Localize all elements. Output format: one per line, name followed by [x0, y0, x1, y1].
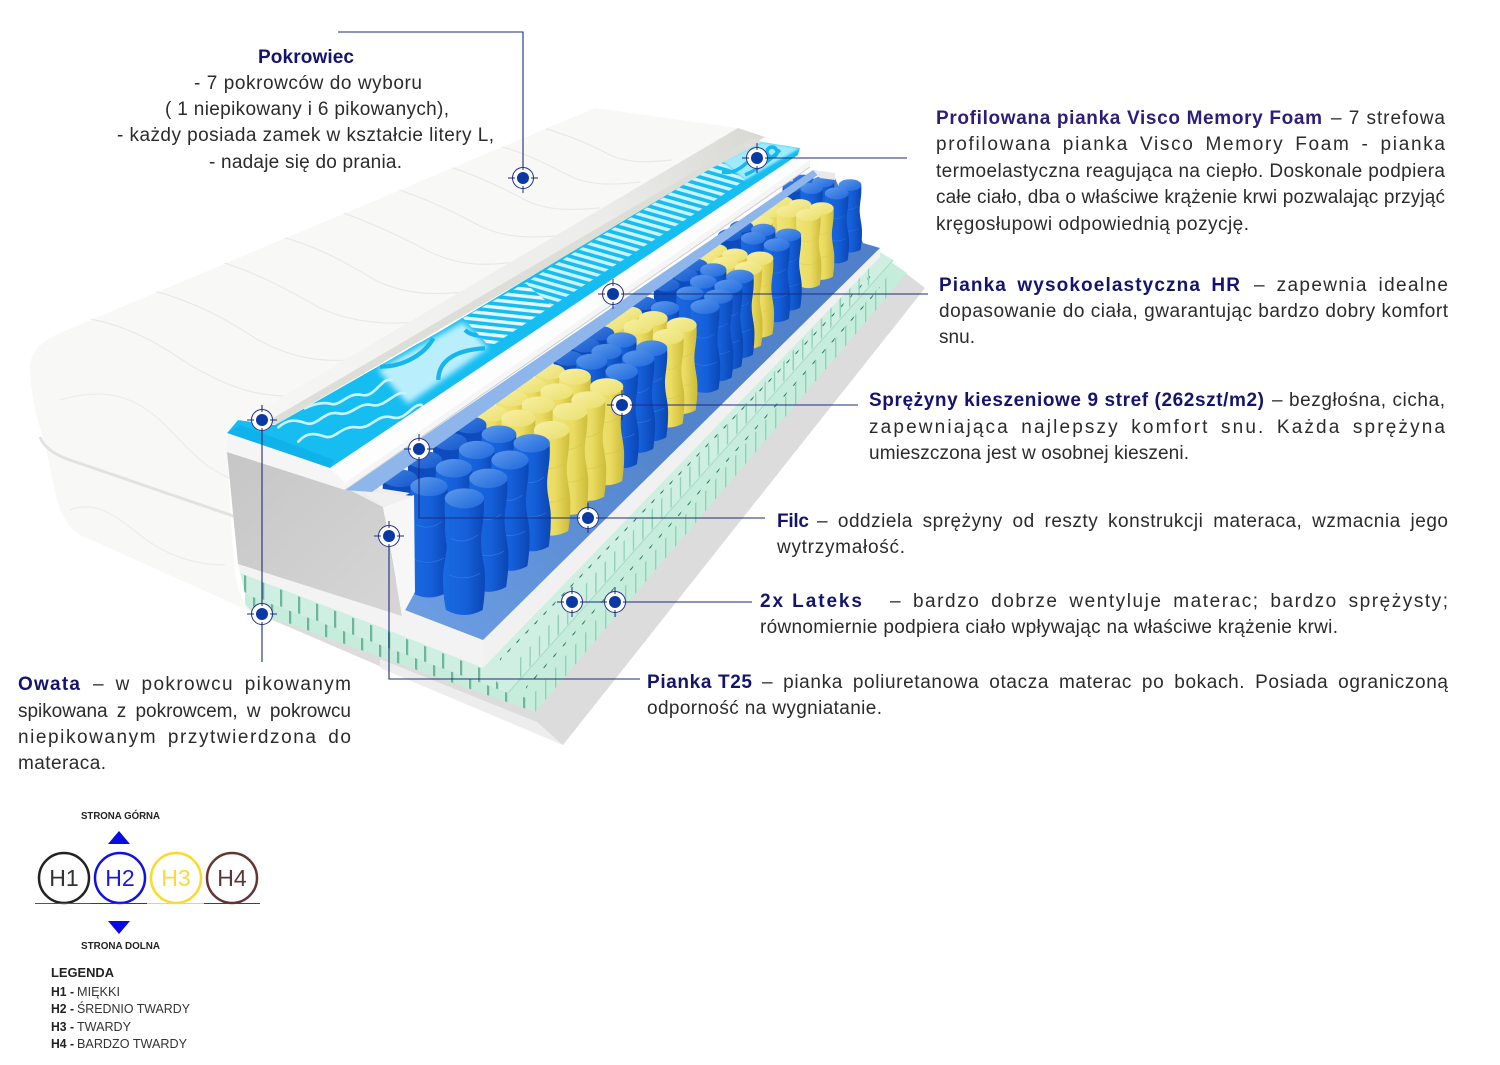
H4: H4 — [217, 865, 247, 891]
callout: Visco Memory Foam — [742, 108, 1445, 235]
legend: BARDZO TWARDY — [77, 1036, 187, 1051]
callout: 2x Lateks: równomiernie podpiera ciało wpływając na właściwe krążenie krwi. — [760, 617, 1338, 638]
callout: Visco Memory Foam: profilowana pianka Visco Memory Foam - pianka — [936, 134, 1445, 155]
legend: H3 - — [51, 1019, 74, 1034]
callout: 2x Lateks — [557, 587, 1448, 638]
pale arc zone — [378, 322, 488, 404]
callout: Pianka HR: dopasowanie do ciała, gwarantując bardzo dobry komfort — [939, 301, 1449, 322]
callout: Filc: – oddziela sprężyny od reszty konstrukcji materaca, wzmacnia jego — [817, 511, 1448, 532]
wave lines — [278, 380, 422, 442]
icon: arrow down — [108, 921, 130, 934]
legend: MIĘKKI — [77, 984, 120, 999]
felt layer — [400, 178, 880, 640]
T25 front foam strip — [238, 248, 880, 668]
legend: ŚREDNIO TWARDY — [77, 1001, 190, 1016]
arc zone rear — [722, 142, 800, 180]
callout: Visco Memory Foam: termoelastyczna reagująca na ciepło. Doskonale podpiera — [936, 161, 1445, 182]
lower latex layer — [245, 258, 907, 713]
blue arcs — [380, 330, 492, 380]
H4 — [207, 853, 257, 903]
upper latex layer — [240, 252, 893, 693]
icon: arrow up — [108, 831, 130, 844]
callout: Pokrowiec: Pokrowiec — [258, 47, 354, 68]
H3 — [151, 853, 201, 903]
quilted cover — [38, 128, 672, 611]
H1 — [39, 853, 89, 903]
legend: H1 - — [51, 984, 74, 999]
callout: Pianka T25 — [374, 521, 1448, 719]
callout: Visco Memory Foam: kręgosłupowi odpowiednią pozycję. — [936, 214, 1249, 235]
legend: LEGENDA — [51, 965, 115, 980]
H1: H1 — [49, 865, 79, 891]
legend: H2 - — [51, 1001, 74, 1016]
callout: Sprężyny kieszeniowe: Sprężyny kieszeniowe 9 stref (262szt/m2) — [869, 390, 1264, 411]
callout: Sprężyny kieszeniowe — [607, 390, 1445, 464]
firmness scale — [35, 809, 260, 952]
callout: Pokrowiec: - 7 pokrowców do wyboru — [194, 73, 422, 94]
legend — [51, 965, 190, 1051]
callout: Pianka T25: Pianka T25 — [647, 672, 752, 693]
legend: TWARDY — [77, 1019, 131, 1034]
pocket springs — [381, 175, 862, 615]
callout: Pianka T25: – pianka poliuretanowa otacza materac po bokach. Posiada ograniczoną — [762, 672, 1448, 693]
callout: Filc: wytrzymałość. — [776, 537, 905, 558]
legend: H4 - — [51, 1036, 74, 1051]
callout: 2x Lateks: 2x Lateks — [760, 591, 862, 612]
callout: Pokrowiec: - nadaje się do prania. — [209, 152, 402, 173]
callout: Pokrowiec: - każdy posiada zamek w kształcie litery L, — [117, 125, 494, 146]
callout: Pokrowiec: ( 1 niepikowany i 6 pikowanych), — [165, 99, 449, 120]
callout: Pianka HR: – zapewnia idealne — [1254, 275, 1448, 296]
callout: Sprężyny kieszeniowe: umieszczona jest w osobnej kieszeni. — [869, 443, 1189, 464]
mattress illustration — [30, 108, 925, 745]
cover inner band — [253, 128, 765, 425]
callout: Sprężyny kieszeniowe: zapewniająca najlepszy komfort snu. Każda sprężyna — [869, 417, 1445, 438]
callout: Filc: Filc — [777, 511, 809, 532]
callout: Visco Memory Foam: całe ciało, dba o właściwe krążenie krwi pozwalając przyjąć — [936, 187, 1445, 208]
callout: Owata: niepikowanym przytwierdzona do — [18, 727, 351, 748]
callout: Owata — [18, 405, 351, 774]
base foam layer — [247, 255, 925, 745]
memory foam layer — [227, 142, 800, 468]
callout: Visco Memory Foam: Profilowana pianka Visco Memory Foam — [936, 108, 1322, 129]
H3: H3 — [161, 865, 191, 891]
stripe zones — [463, 283, 552, 347]
callout: Pianka T25: odporność na wygniatanie. — [647, 698, 882, 719]
zipper — [40, 437, 245, 520]
grey foam block front — [227, 452, 415, 616]
callout: Visco Memory Foam: – 7 strefowa — [1331, 108, 1445, 129]
firmness scale: STRONA DOLNA — [81, 941, 160, 952]
H2 — [95, 853, 145, 903]
firmness scale: STRONA GÓRNA — [81, 809, 160, 822]
callout: Pianka HR: snu. — [939, 327, 975, 348]
callout: Owata: – w pokrowcu pikowanym — [93, 674, 351, 695]
HR foam layer — [227, 155, 810, 490]
callout: Owata: Owata — [18, 674, 80, 695]
callout: 2x Lateks: – bardzo dobrze wentyluje materac; bardzo sprężysty; — [890, 591, 1448, 612]
callout: Pianka HR — [598, 275, 1449, 348]
callout: Pokrowiec — [117, 32, 538, 193]
callout: Filc — [404, 434, 1448, 558]
callout: Owata: materaca. — [18, 753, 106, 774]
H2: H2 — [105, 865, 135, 891]
callout: Pianka HR: Pianka wysokoelastyczna HR — [939, 275, 1240, 296]
callout: Owata: spikowana z pokrowcem, w pokrowcu — [18, 701, 351, 722]
callout: Sprężyny kieszeniowe: – bezgłośna, cicha, — [1272, 390, 1445, 411]
pale felt below HR — [345, 170, 822, 492]
